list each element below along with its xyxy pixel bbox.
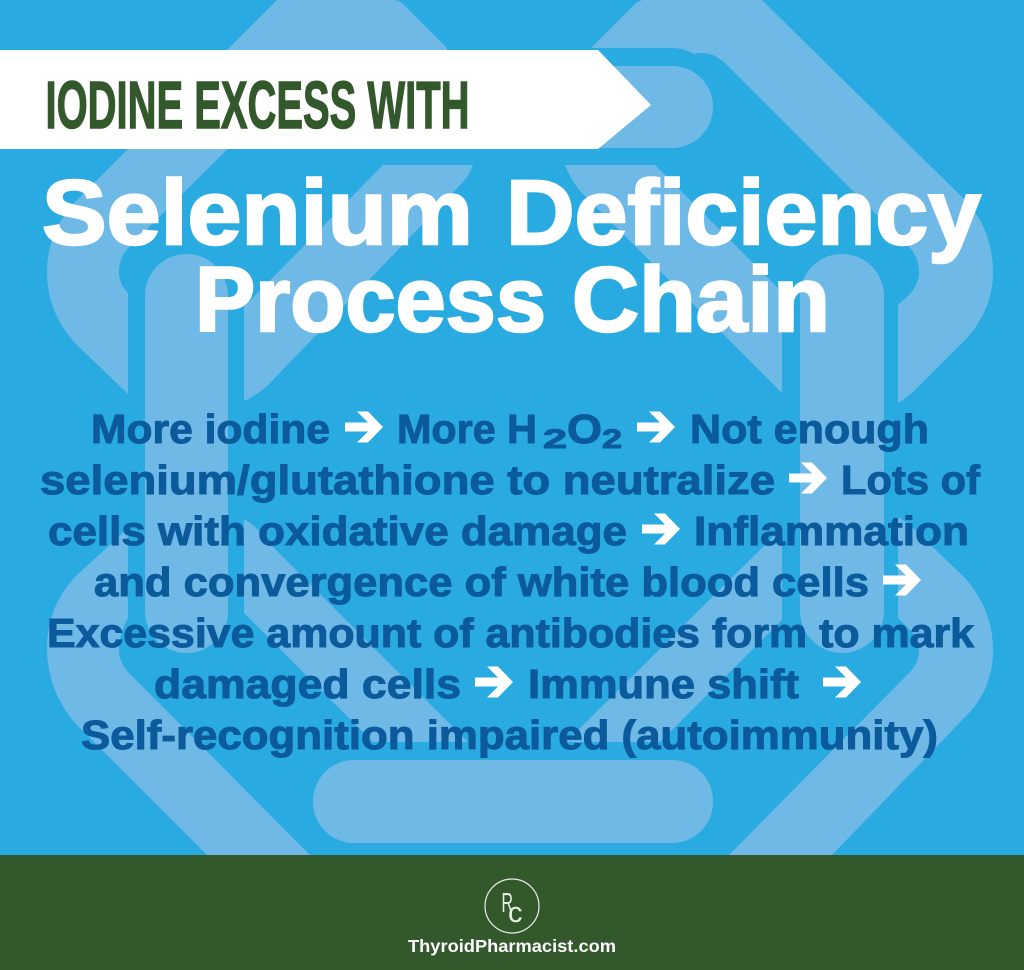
- chain link: top pill: [313, 66, 713, 148]
- title line 2: Chain: [572, 249, 830, 351]
- line 1: [91, 406, 929, 454]
- chain band: inner upper right: [565, 165, 782, 393]
- banner: iodine excess with: [0, 50, 651, 149]
- line 1: O: [567, 406, 602, 452]
- footer band: [0, 855, 1024, 970]
- title: [42, 162, 981, 351]
- icon: RC logo: R: [502, 887, 513, 918]
- line 5: Excessive amount of antibodies form to mark: [47, 610, 974, 656]
- line 4: and convergence of white blood cells: [94, 559, 869, 605]
- line 2: Lots of: [841, 457, 980, 503]
- line 2: selenium/glutathione to neutralize: [40, 457, 775, 503]
- chain band: inner lower right: [566, 528, 782, 742]
- chain band: top right: [591, 0, 993, 403]
- chain band: bottom left: [47, 528, 310, 855]
- title line 2: Process: [195, 249, 546, 351]
- footer website: ThyroidPharmacist.com: [408, 936, 616, 956]
- chain band: inner lower left: [244, 519, 468, 742]
- chain band: inner upper left: [244, 165, 473, 401]
- line 7: Self-recognition impaired (autoimmunity): [81, 712, 938, 758]
- banner heading: IODINE EXCESS WITH: [46, 68, 470, 143]
- line 1: More H: [397, 406, 537, 452]
- title line 1: Selenium: [42, 162, 473, 264]
- line 6: Immune shift: [528, 661, 799, 707]
- line 6: damaged cells: [154, 661, 461, 707]
- line 3: Inflammation: [694, 508, 969, 554]
- chain link: left pill: [145, 254, 228, 653]
- title line 1: Deficiency: [506, 162, 981, 264]
- line 3: [48, 508, 969, 554]
- title line 2: [195, 249, 830, 351]
- chain band: top left: [47, 0, 447, 394]
- process chain text: [40, 406, 980, 758]
- banner arrow shape: [0, 50, 651, 149]
- line 3: cells with oxidative damage: [48, 508, 627, 554]
- line 1: 2: [602, 424, 622, 454]
- icon: RC logo: c: [508, 897, 522, 929]
- chain link: right pill: [800, 254, 884, 653]
- title line 1: [42, 162, 981, 264]
- line 1: More iodine: [91, 406, 330, 452]
- line 6: [154, 661, 861, 707]
- chain link: bottom pill: [313, 760, 713, 843]
- line 1: Not enough: [690, 406, 929, 452]
- line 1: 2: [543, 424, 567, 454]
- footer: [0, 855, 1024, 970]
- icon: RC logo: [485, 879, 539, 933]
- chain band: bottom right: [729, 517, 993, 855]
